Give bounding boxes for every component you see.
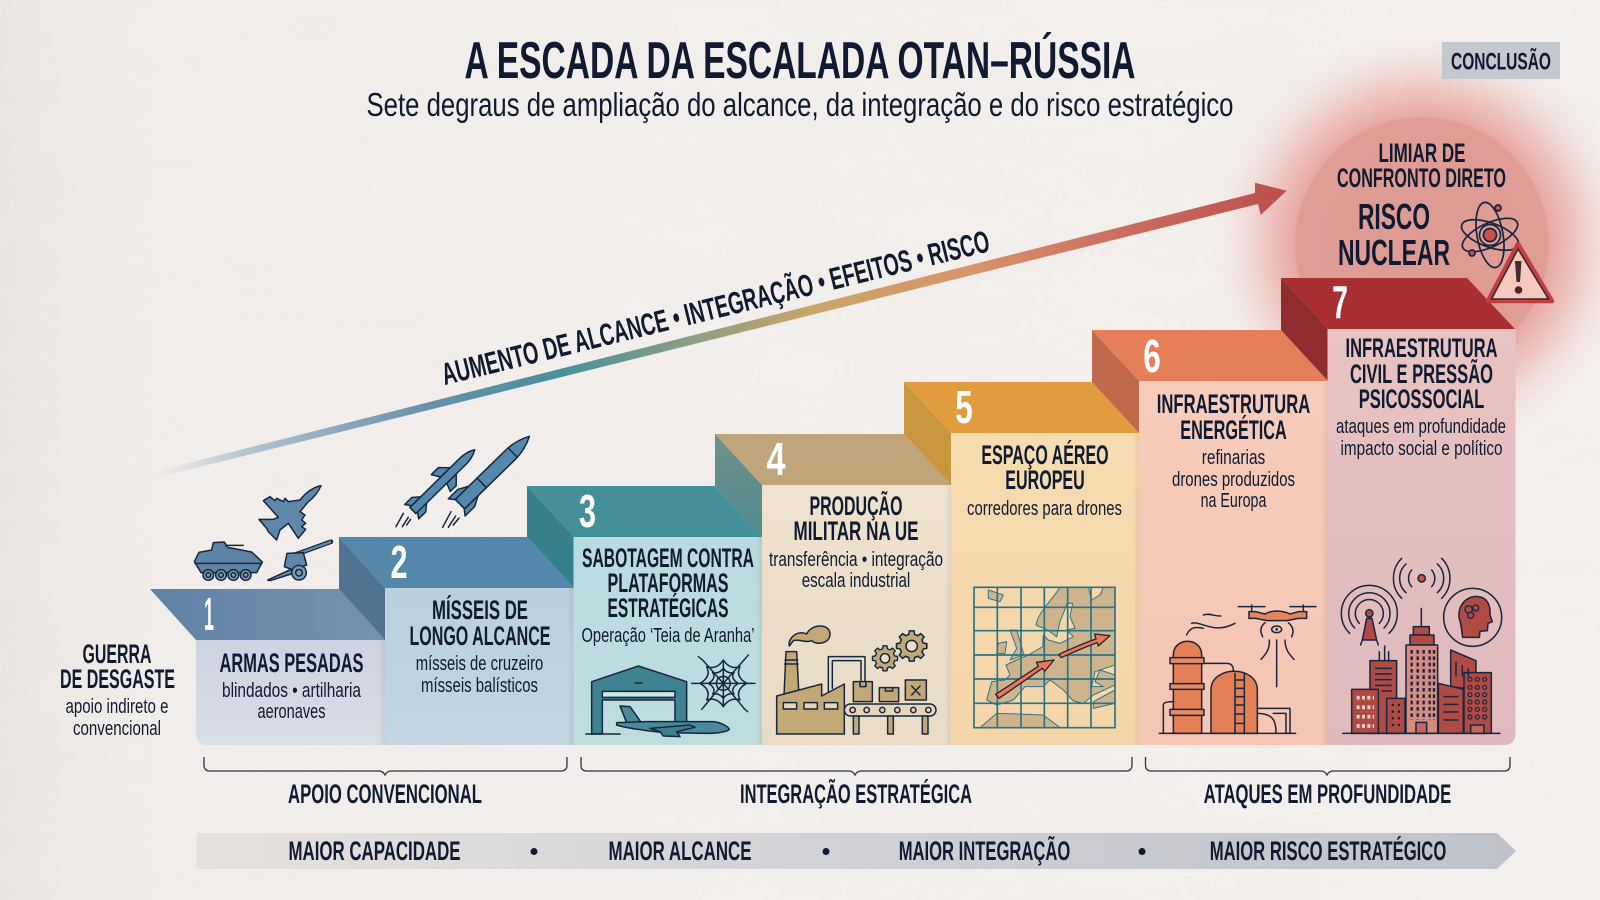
step 4: produção militar: transferência • integração [769,549,943,571]
step 3: sabotagem: ESTRATÉGICAS [608,593,728,623]
step 4: produção militar: PRODUÇÃO [810,491,902,521]
panel edge shading [379,381,1328,745]
step 5: espaço aéreo: EUROPEU [1005,465,1085,495]
subtitle: Sete degraus de ampliação do alcance, da integração e do risco estratégico [366,86,1234,123]
red glow: nuclear threshold [1207,29,1600,459]
step 2: mísseis de longo alcance: mísseis balísticos [421,675,538,697]
icons: hangar, plane, web, factory [586,626,936,737]
step 2: mísseis de longo alcance: 2 [390,536,408,588]
left text: guerra de desgaste [60,639,175,740]
bottom progress band: MAIOR CAPACIDADE [288,836,460,866]
icon: fighter jet [259,486,321,540]
step 7: infraestrutura civil [1281,276,1516,745]
title: A ESCADA DA ESCALADA OTAN–RÚSSIA [464,32,1136,90]
step 1: armas pesadas: blindados • artilharia [222,680,362,702]
step 3: sabotagem: 3 [579,485,596,537]
icon: head with gears [1444,588,1502,646]
step 1: armas pesadas: aeronaves [258,701,326,723]
bracket: apoio convencional [204,757,567,809]
icon: cruise missile [403,441,484,521]
step 6: infraestrutura energética: drones produzidos [1172,469,1295,491]
step 3: sabotagem: Operação ‘Teia de Aranha’ [582,625,754,647]
icon: tank [194,542,262,580]
bottom progress band: MAIOR INTEGRAÇÃO [899,836,1070,866]
icons: tank, jet, cannon, missiles [194,428,538,581]
step 6: infraestrutura energética [1092,330,1328,745]
icon: city and psychosocial signals [1341,585,1502,733]
step 4: produção militar: MILITAR NA UE [794,516,918,546]
threshold text: LIMIAR DE [1378,138,1466,168]
step 6: infraestrutura energética: refinarias [1202,447,1265,469]
step 7: infraestrutura civil: CIVIL E PRESSÃO [1350,359,1493,389]
nuclear risk heading: RISCO [1358,196,1430,237]
nuclear risk heading: NUCLEAR [1338,232,1450,273]
step 7: infraestrutura civil: INFRAESTRUTURA [1346,333,1498,363]
bottom progress band: MAIOR RISCO ESTRATÉGICO [1210,836,1446,866]
bracket: integração estratégica: INTEGRAÇÃO ESTRATÉGICA [740,779,972,809]
step 7: infraestrutura civil: impacto social e político [1340,438,1502,460]
bracket: ataques em profundidade [1146,757,1510,809]
icon: factory [777,626,936,734]
step 6: infraestrutura energética: na Europa [1201,490,1267,512]
bracket: apoio convencional: APOIO CONVENCIONAL [288,779,482,809]
step 5: espaço aéreo: 5 [955,381,973,433]
step 7: infraestrutura civil: ataques em profundidade [1336,416,1506,438]
left text: guerra de desgaste: convencional [73,718,161,740]
step 2: mísseis de longo alcance: LONGO ALCANCE [410,621,550,651]
icon: warning triangle [1488,244,1552,301]
icon: hangar [586,666,687,734]
step 5: espaço aéreo [904,381,1139,745]
step 3: sabotagem [527,485,762,745]
step 3: sabotagem: SABOTAGEM CONTRA [582,543,754,573]
icon: artillery cannon [268,542,331,581]
bracket: ataques em profundidade: ATAQUES EM PROFUNDIDADE [1204,779,1451,809]
icon: radio tower [1341,585,1397,645]
icon: refinery [1159,614,1296,733]
icon: gears [872,631,927,671]
step 2: mísseis de longo alcance: MÍSSEIS DE [432,595,528,625]
step 2: mísseis de longo alcance [339,536,574,745]
step 4: produção militar [715,433,951,745]
step 7: infraestrutura civil: 7 [1332,276,1348,328]
left text: guerra de desgaste: DE DESGASTE [60,664,175,694]
icon: drone [1238,605,1316,687]
icon: map of europe [974,587,1115,728]
bottom progress band: MAIOR ALCANCE [608,836,752,866]
left text: guerra de desgaste: apoio indireto e [66,696,168,718]
icon: ballistic missile [448,428,538,516]
icon: spider web [692,655,755,712]
icons: refinery and drone [1159,605,1316,733]
icon: signal waves [1393,558,1450,598]
bracket: integração estratégica [581,757,1132,809]
step 5: espaço aéreo: ESPAÇO AÉREO [981,440,1109,470]
nuclear risk heading [1338,196,1450,273]
arrow label: AUMENTO DE ALCANCE • INTEGRAÇÃO • EFEITOS • RISCO [438,224,993,392]
step 4: produção militar: 4 [766,433,786,485]
step 1: armas pesadas: ARMAS PESADAS [220,648,364,678]
icon: motion lines [396,512,459,527]
step 5: espaço aéreo: corredores para drones [967,498,1122,520]
step 6: infraestrutura energética: INFRAESTRUTURA [1157,389,1310,419]
step 1: armas pesadas: 1 [204,588,214,640]
step 1: armas pesadas [150,588,385,745]
step 2: mísseis de longo alcance: mísseis de cruzeiro [416,653,543,675]
icon: plane [617,706,729,737]
step 7: infraestrutura civil: PSICOSSOCIAL [1359,384,1484,414]
step 6: infraestrutura energética: 6 [1143,330,1161,382]
left text: guerra de desgaste: GUERRA [82,639,152,669]
conclusion tag [1442,42,1560,79]
bottom progress band [196,833,1516,869]
threshold text [1337,138,1506,193]
step 4: produção militar: escala industrial [802,570,910,592]
icon: city [1343,608,1500,733]
icon: atom [1458,200,1522,270]
step 6: infraestrutura energética: ENERGÉTICA [1180,415,1287,445]
step 3: sabotagem: PLATAFORMAS [608,568,728,598]
main rising arrow [153,183,1287,478]
